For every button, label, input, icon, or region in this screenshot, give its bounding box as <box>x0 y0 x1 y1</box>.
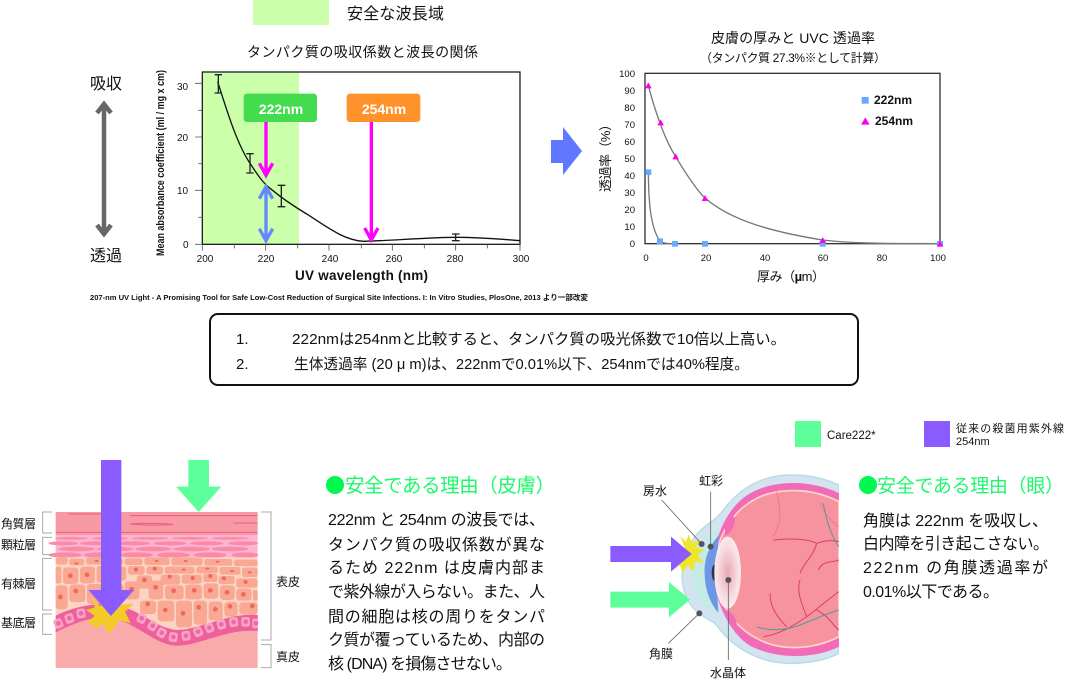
y tick labels: 20 <box>177 133 189 144</box>
safe wavelength shaded band <box>203 73 299 244</box>
y axis title: Mean absorbance coefficient (ml / mg x cm) <box>155 70 167 256</box>
arrow: 254nm <box>610 537 692 572</box>
callout: key findings box <box>210 314 858 385</box>
text block: reason skin: で紫外線が入らない。また、人 <box>328 583 545 601</box>
retina <box>715 491 839 648</box>
aqueous chamber <box>692 529 718 614</box>
finding 1: 1. <box>236 331 249 348</box>
skin layer labels: 顆粒層 <box>1 537 36 552</box>
y tick labels: 40 <box>624 171 635 182</box>
heading: absorption chart title: タンパク質の吸収係数と波長の関係 <box>247 44 478 60</box>
y tick labels: 0 <box>630 239 635 250</box>
x tick labels: 40 <box>760 253 770 264</box>
text block: reason eye <box>863 512 1049 601</box>
layer brackets <box>43 512 271 668</box>
error bars <box>215 75 460 241</box>
lens <box>714 537 741 609</box>
eye part labels <box>643 474 746 680</box>
222nm curve <box>648 172 675 244</box>
legend: safe wavelength band <box>253 0 444 25</box>
illustration: eye cross-section <box>610 474 839 680</box>
chart: transmittance vs skin thickness <box>598 69 946 284</box>
x tick labels: 220 <box>258 254 275 265</box>
axis direction: absorption to transmission: 吸収 <box>90 75 122 93</box>
222nm tag and arrow <box>244 94 317 175</box>
text block: reason eye: 0.01%以下である。 <box>863 583 999 601</box>
axis direction: absorption to transmission: 透過 <box>90 247 122 265</box>
text block: reason skin: ク質が覆っているため、内部の <box>328 631 545 649</box>
arrow: to right chart <box>551 127 582 175</box>
legend: Care222: Care222* <box>827 430 876 442</box>
text block: reason skin <box>328 511 545 673</box>
x tick labels: 260 <box>386 254 403 265</box>
254nm curve <box>648 86 940 244</box>
legend: conventional germicidal UV: 254nm <box>956 436 990 448</box>
222nm markers <box>645 169 943 247</box>
legend: Care222 <box>795 421 876 447</box>
y tick labels: 0 <box>183 240 189 251</box>
heading: reason skin: 安全である理由（皮膚） <box>345 475 555 497</box>
y tick labels: 60 <box>624 137 635 148</box>
illustration: skin cross-section <box>1 460 300 668</box>
x tick labels: 200 <box>197 254 214 265</box>
choroid ring <box>712 483 839 656</box>
y tick labels: 50 <box>624 154 635 165</box>
chart: absorbance vs wavelength <box>155 70 530 283</box>
x tick labels: 100 <box>930 253 946 264</box>
x axis title: 厚み（µm） <box>757 269 825 284</box>
x tick labels <box>643 253 946 264</box>
y tick labels: 30 <box>624 188 635 199</box>
heading: reason eye: 安全である理由（眼） <box>877 475 1064 497</box>
leader lines and dots <box>662 492 731 660</box>
absorbance curve <box>218 82 520 241</box>
text block: reason eye: 222nm の角膜透過率が <box>863 559 1048 577</box>
text block: reason skin: 222nm と 254nm の波長では、 <box>328 511 545 529</box>
pupil <box>712 564 715 581</box>
y tick labels: 100 <box>619 69 635 80</box>
y tick labels: 70 <box>624 120 635 131</box>
arrow: 254nm penetrating <box>88 460 134 616</box>
254nm markers <box>645 82 943 247</box>
x tick labels <box>197 254 530 265</box>
text block: reason skin: るため 222nm は皮膚内部ま <box>328 559 545 577</box>
axis direction: absorption to transmission <box>90 75 122 265</box>
heading: skin thickness chart title: （タンパク質 27.3%※として計算） <box>700 50 886 65</box>
text block: reason skin: タンパク質の吸収係数が異な <box>328 536 545 554</box>
y tick labels: 10 <box>177 186 189 197</box>
chart legend labels: 222nm <box>874 93 912 107</box>
y tick labels: 10 <box>624 222 635 233</box>
eye part labels: 水晶体 <box>710 666 746 680</box>
y tick labels: 90 <box>624 86 635 97</box>
stratum granulosum <box>48 535 258 559</box>
chart legend markers <box>861 97 870 125</box>
text block: reason eye: 角膜は 222nm を吸収し、 <box>863 512 1048 530</box>
sclera outer layer <box>682 475 839 663</box>
y axis title: 透過率（%） <box>598 118 613 192</box>
x tick labels: 0 <box>643 253 649 264</box>
chart legend labels: 254nm <box>875 114 913 128</box>
text block: reason skin: 間の細胞は核の周りをタンパ <box>328 608 545 626</box>
legend: safe wavelength band: 安全な波長域 <box>347 5 444 23</box>
y tick labels <box>177 82 189 251</box>
stratum corneum <box>56 512 258 535</box>
citation: 207-nm UV Light - A Promising Tool for Safe Low-Cost Reduction of Surgical Site Infections. I: In Vitro Studies, PlosOne, 2013 より一部改変 <box>90 292 588 302</box>
skin layer labels: 有棘層 <box>1 577 36 591</box>
y tick labels: 20 <box>624 205 635 216</box>
arrow: 222nm stopped at surface <box>176 460 221 512</box>
skin layer labels: 角質層 <box>1 516 36 531</box>
dermis <box>56 616 258 668</box>
arrow: 222nm <box>610 582 690 617</box>
stratum spinosum cells <box>56 557 258 634</box>
x tick labels: 240 <box>322 254 339 265</box>
transmission blue arrow <box>259 187 273 241</box>
finding 2: 生体透過率 (20 μ m)は、222nmで0.01%以下、254nmでは40%程度。 <box>294 356 749 373</box>
skin layer labels: 基底層 <box>1 616 36 630</box>
skin layer labels: 表皮 <box>276 575 300 589</box>
chart: absorbance vs wavelength: 254nm <box>362 101 406 117</box>
x axis title: UV wavelength (nm) <box>295 268 428 283</box>
254nm tag and arrow <box>347 94 420 240</box>
heading: skin thickness chart title <box>700 30 886 65</box>
text block: reason skin: 核 (DNA) を損傷させない。 <box>328 655 512 673</box>
star on cornea <box>675 535 704 573</box>
text block: reason eye: 白内障を引き起こさない。 <box>863 535 1049 553</box>
ciliary <box>725 516 737 627</box>
iris <box>705 535 719 613</box>
finding 2: 2. <box>236 356 249 373</box>
y tick labels: 80 <box>624 103 635 114</box>
x tick labels: 300 <box>513 254 530 265</box>
eye part labels: 虹彩 <box>699 474 723 488</box>
skin layer labels <box>1 516 300 664</box>
chart: absorbance vs wavelength: 222nm <box>259 101 303 117</box>
x tick labels: 80 <box>877 253 887 264</box>
y tick labels: 30 <box>177 82 189 93</box>
x tick labels: 20 <box>701 253 711 264</box>
finding 1: 222nmは254nmと比較すると、タンパク質の吸光係数で10倍以上高い。 <box>292 330 786 348</box>
x tick labels: 280 <box>447 254 464 265</box>
basal layer band <box>53 604 258 646</box>
legend: conventional germicidal UV <box>924 421 1064 448</box>
y tick labels <box>619 69 635 250</box>
retinal vessels <box>757 492 839 637</box>
x tick labels: 60 <box>818 253 828 264</box>
impact star <box>86 597 134 634</box>
eye part labels: 角膜 <box>649 647 673 661</box>
legend: conventional germicidal UV: 従来の殺菌用紫外線 <box>956 421 1064 435</box>
skin layer labels: 真皮 <box>276 650 300 664</box>
eye part labels: 房水 <box>643 484 667 498</box>
heading: skin thickness chart title: 皮膚の厚みと UVC 透過率 <box>711 30 875 46</box>
chart legend labels <box>874 93 913 128</box>
